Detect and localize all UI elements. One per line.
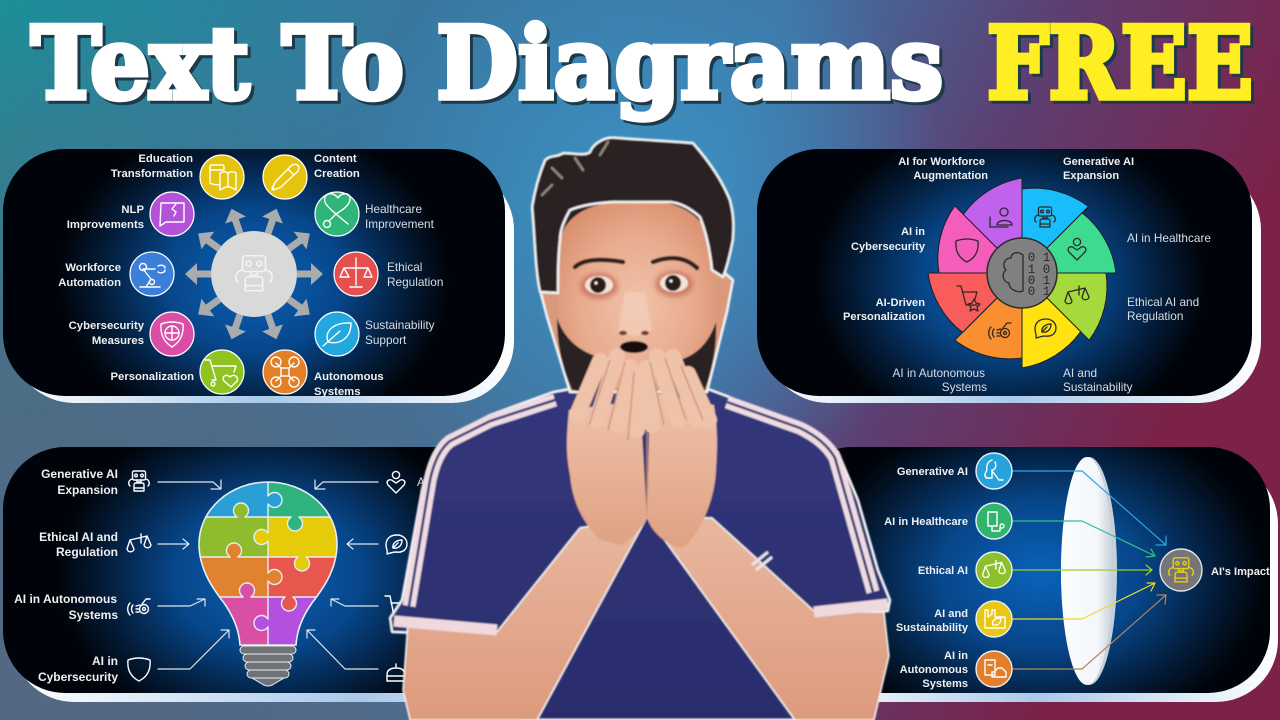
labels: hub diagram: Sustainability <box>365 318 435 332</box>
labels: hub diagram: Improvement <box>365 217 435 231</box>
labels: lens: Sustainability <box>896 622 969 634</box>
icon: sustainability leaf <box>315 312 359 356</box>
labels: hub diagram: Ethical <box>387 260 422 274</box>
bulb icons <box>127 471 410 681</box>
labels: pinwheel: AI for Workforce <box>898 156 985 168</box>
left arm <box>403 517 647 720</box>
labels: pinwheel: Cybersecurity <box>851 241 926 253</box>
labels: hub diagram: Measures <box>92 335 144 347</box>
icon: healthcare stethoscope <box>315 192 359 236</box>
lens output circle <box>1160 549 1202 591</box>
hub robot circle <box>211 231 297 317</box>
labels: pinwheel: Ethical AI and <box>1127 295 1199 309</box>
labels: hub diagram: Regulation <box>387 275 443 289</box>
labels: lens: Generative AI <box>897 466 968 478</box>
labels: pinwheel: Augmentation <box>913 170 988 182</box>
eyes <box>580 271 693 299</box>
labels: pinwheel: Personalization <box>843 311 925 323</box>
labels: pinwheel: Regulation <box>1127 309 1183 323</box>
pinwheel hub <box>987 238 1057 308</box>
icon: content pen <box>263 155 307 199</box>
labels: pinwheel <box>843 156 1211 394</box>
labels: bulb: AI in <box>92 654 118 668</box>
mustache <box>620 341 648 353</box>
beard <box>557 318 716 396</box>
labels: bulb: Systems <box>69 608 118 622</box>
labels: hub diagram: Transformation <box>111 168 193 180</box>
pinwheel hub: 0 1 <box>1028 274 1050 288</box>
icon: education book <box>200 155 244 199</box>
labels: hub diagram: NLP <box>121 204 144 216</box>
labels: pinwheel: AI in <box>901 226 925 238</box>
lens <box>1061 457 1117 685</box>
labels: bulb: Regulation <box>56 545 118 559</box>
labels: lens: AI in Healthcare <box>884 516 968 528</box>
panel: light bulb puzzle diagram <box>3 447 437 702</box>
icon: NLP bubble <box>150 192 194 236</box>
labels: bulb: Cybersecurity <box>38 670 118 684</box>
icon: ethical scales <box>334 252 378 296</box>
hair highlights <box>542 142 608 195</box>
labels: hub diagram: Workforce <box>65 262 121 274</box>
pinwheel wedges <box>928 178 1116 368</box>
labels: hub diagram: Personalization <box>110 371 194 383</box>
icon: cybersecurity shield globe <box>150 312 194 356</box>
hair <box>532 138 734 293</box>
labels: lens: Autonomous <box>900 664 968 676</box>
pinwheel icons <box>956 207 1089 339</box>
panel: radial hub diagram <box>3 149 514 403</box>
presenter figure <box>390 138 890 720</box>
labels: hub diagram: Systems <box>314 386 360 398</box>
bulb puzzle <box>195 478 341 647</box>
labels: hub diagram: Healthcare <box>365 202 422 216</box>
labels: bulb: Ethical AI and <box>39 530 118 544</box>
head silhouette with ears and neck <box>540 262 733 392</box>
labels: pinwheel: AI and <box>1063 366 1097 380</box>
icon: personalization cart <box>200 350 244 394</box>
labels: lens <box>884 466 1270 690</box>
converging arrows <box>1012 471 1166 669</box>
pinwheel hub: 0 1 <box>1028 285 1050 299</box>
eyebrows <box>575 258 697 268</box>
labels: lens: AI and <box>934 608 968 620</box>
labels: hub diagram: Creation <box>314 168 360 180</box>
shirt logo <box>752 552 772 570</box>
labels: lens: Ethical AI <box>918 565 968 577</box>
pinwheel hub: 0 1 <box>1028 251 1050 265</box>
labels: hub diagram: Cybersecurity <box>69 320 144 332</box>
labels: pinwheel: Sustainability <box>1063 380 1133 394</box>
labels: pinwheel: Generative AI <box>1063 156 1134 168</box>
left hand <box>567 356 647 545</box>
bulb base <box>240 646 296 686</box>
right hand <box>646 356 717 548</box>
sleeve bands <box>394 604 888 630</box>
labels: pinwheel: AI-Driven <box>876 297 925 309</box>
labels: bulb: AI in Autonomous <box>14 592 117 606</box>
shoulder stripes left <box>409 400 555 606</box>
shoulder stripes right <box>727 402 873 592</box>
labels: hub diagram <box>58 153 443 398</box>
panel: lens converging diagram <box>790 447 1278 702</box>
shirt <box>390 386 890 720</box>
arrows: bulb inputs <box>158 480 378 669</box>
labels: bulb <box>14 467 428 684</box>
labels: bulb: Generative AI <box>41 467 118 481</box>
pinwheel hub: 1 0 <box>1028 263 1050 277</box>
labels: hub diagram: Improvements <box>67 219 144 231</box>
labels: hub diagram: Education <box>138 153 193 165</box>
labels: lens: AI in <box>944 650 968 662</box>
labels: hub diagram: Support <box>365 333 407 347</box>
labels: pinwheel: Systems <box>942 380 987 394</box>
face <box>558 200 716 392</box>
labels: hub diagram: Content <box>314 153 357 165</box>
right arm <box>648 517 889 720</box>
labels: hub diagram: Automation <box>58 277 121 289</box>
lens input icon circles <box>976 453 1012 687</box>
labels: lens: AI's Impact <box>1211 566 1270 578</box>
labels: pinwheel: AI in Healthcare <box>1127 231 1211 245</box>
labels: bulb: AI <box>417 475 428 489</box>
hub arrows <box>185 205 323 343</box>
labels: lens: Systems <box>922 678 968 690</box>
labels: bulb: Expansion <box>57 483 118 497</box>
icon: autonomous drone <box>263 350 307 394</box>
hair backing behind forehead <box>556 198 716 270</box>
labels: pinwheel: Expansion <box>1063 170 1119 182</box>
title text white: Text To Diagrams <box>31 6 943 122</box>
title <box>31 6 1253 122</box>
labels: pinwheel: AI in Autonomous <box>893 366 985 380</box>
nose and nostrils <box>618 292 652 336</box>
icon: workforce robot arm <box>130 252 174 296</box>
panel: pinwheel diagram <box>757 149 1261 403</box>
labels: hub diagram: Autonomous <box>314 371 384 383</box>
